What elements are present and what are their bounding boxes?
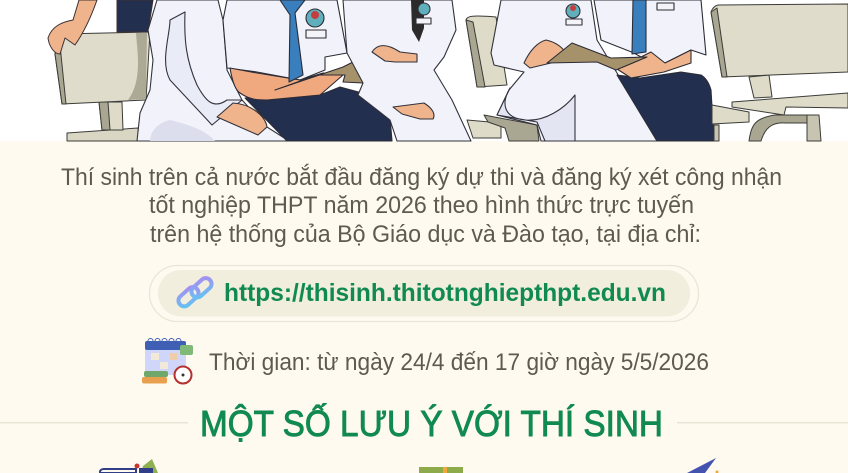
intro text block: trên hệ thống của Bộ Giáo dục và Đào tạo, tại địa chỉ: bbox=[150, 221, 701, 248]
far-left student arm and trousers bbox=[48, 0, 153, 54]
icon: calendar with clock and books bbox=[142, 339, 193, 384]
icon: chain link bbox=[176, 276, 214, 309]
student 2: boy with blue tie and book bbox=[223, 0, 392, 141]
icon: middle note top bbox=[419, 467, 463, 473]
time text: Thời gian: từ ngày 24/4 đến 17 giờ ngày 5/5/2026 bbox=[209, 349, 709, 376]
URL text: https://thisinh.thitotnghiepthpt.edu.vn bbox=[224, 279, 666, 307]
section heading: MỘT SỐ LƯU Ý VỚI THÍ SINH bbox=[200, 402, 663, 444]
left bench bbox=[55, 32, 150, 141]
student 1: ao dai bbox=[137, 0, 289, 141]
icon: paper plane top bbox=[687, 458, 718, 473]
icon: left note top bbox=[100, 459, 158, 473]
illustration: students sitting on benches bbox=[0, 0, 848, 141]
middle bench bbox=[466, 16, 539, 141]
intro text block: Thí sinh trên cả nước bắt đầu đăng ký dự thi và đăng ký xét công nhận bbox=[61, 164, 782, 191]
intro text block bbox=[61, 164, 782, 248]
right bench bbox=[711, 4, 848, 141]
URL pill bbox=[150, 266, 698, 322]
student 5: boy with blue tie bbox=[547, 0, 714, 141]
student 3: ao dai with braid bbox=[343, 0, 471, 141]
intro text block: tốt nghiệp THPT năm 2026 theo hình thức trực tuyến bbox=[149, 192, 694, 219]
student 4: ao dai with book bbox=[491, 0, 657, 141]
